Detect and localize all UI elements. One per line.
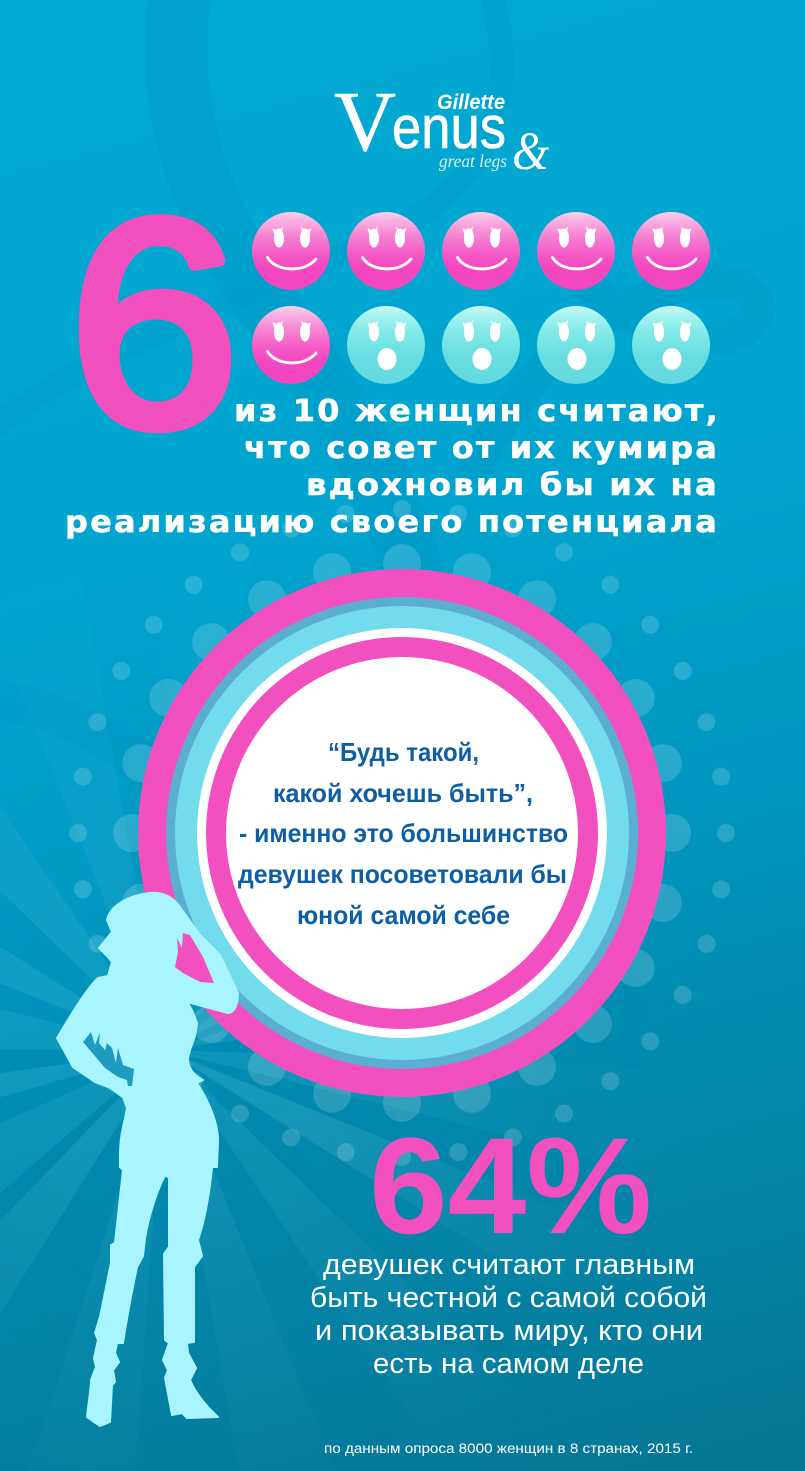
cut-out: flames at waist [83, 1032, 134, 1086]
headline text [65, 394, 720, 540]
stat description [310, 1249, 707, 1380]
circle quote text: девушек посоветовали бы [238, 859, 567, 889]
background rays [0, 806, 462, 1290]
circle quote text: какой хочешь быть”, [273, 778, 533, 808]
headline text: из 10 женщин считают, [234, 394, 720, 429]
headline text: вдохновил бы их на [306, 468, 719, 503]
circle quote text: - именно это большинство [239, 818, 568, 848]
decorative dots around the circle [69, 500, 735, 1166]
big stat 64%: 64% [369, 1110, 652, 1263]
stat description: и показывать миру, кто они [315, 1315, 703, 1347]
stat description: быть честной с самой собой [310, 1282, 707, 1314]
circle quote text: “Будь такой, [328, 737, 479, 767]
background ribbons [0, 0, 758, 800]
headline text: реализацию своего потенциала [65, 505, 719, 540]
smiley row: 6 of 10 happy [252, 212, 710, 384]
circle quote text: юной самой себе [297, 900, 510, 930]
logo: Gillette Venus & great legs: & [512, 121, 549, 181]
stat description: девушек считают главным [323, 1249, 695, 1281]
big number 6: 6 [69, 160, 239, 488]
logo: Gillette Venus & great legs: enus [392, 94, 506, 161]
logo: Gillette Venus & great legs: great legs [439, 151, 507, 171]
stat description: есть на самом деле [373, 1348, 644, 1380]
woman silhouette [57, 893, 238, 1426]
circle quote text [238, 737, 568, 930]
logo: Gillette Venus & great legs: Gillette [437, 91, 505, 114]
logo: Gillette Venus & great legs: V [334, 73, 396, 169]
concentric circle panel [138, 569, 666, 1097]
cut-out: flames at arm [175, 933, 214, 983]
footnote: по данным опроса 8000 женщин в 8 странах, 2015 г. [324, 1440, 693, 1456]
logo: Gillette Venus & great legs [334, 73, 549, 181]
headline text: что совет от их кумира [244, 431, 719, 466]
